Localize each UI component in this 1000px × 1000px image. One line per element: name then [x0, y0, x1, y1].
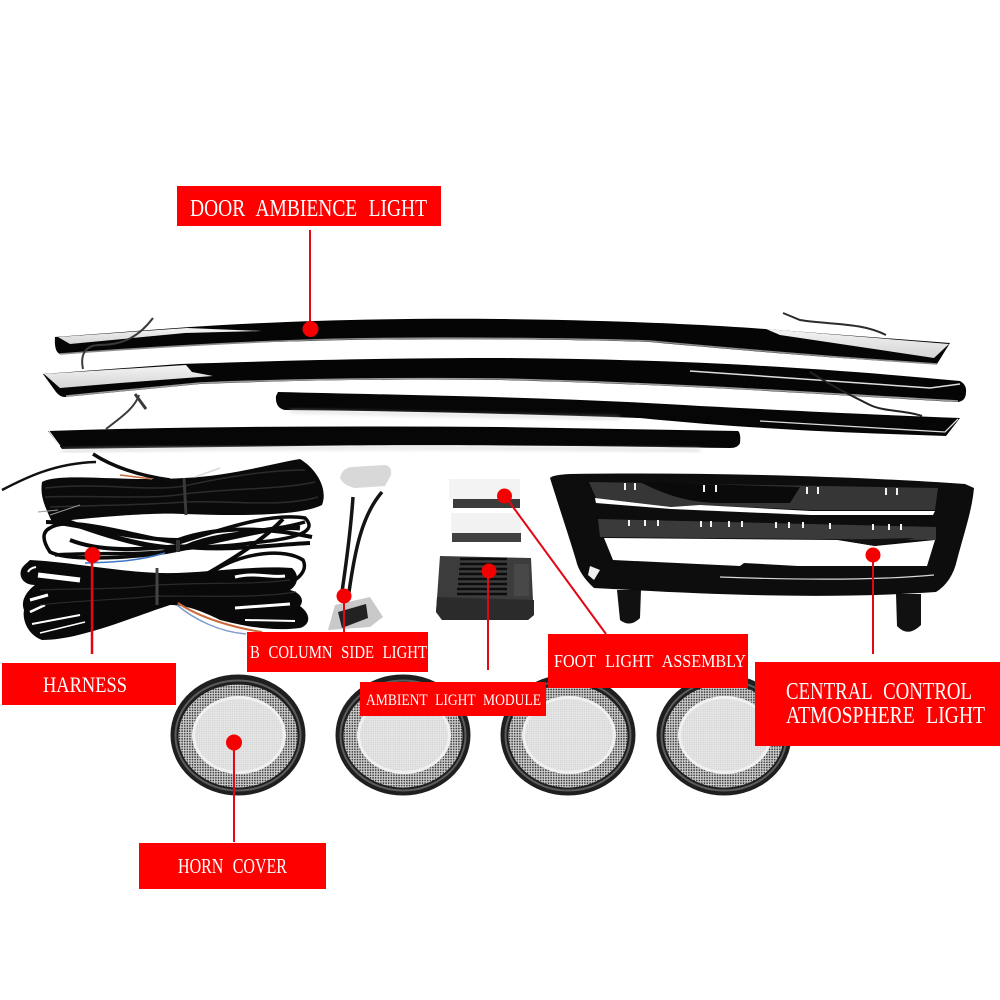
- panel: door ambience light strips: [43, 313, 966, 451]
- label: horn cover: [139, 843, 326, 889]
- horn cover 1: [170, 674, 306, 796]
- pointer: central control atmosphere light: [866, 548, 880, 654]
- harness upper bundle: [2, 454, 324, 522]
- panel: horn covers: [170, 674, 792, 796]
- label: door ambience light: DOOR AMBIENCE LIGHT: [190, 196, 427, 222]
- panel: wiring harness: [2, 454, 324, 640]
- upper slot: [589, 482, 938, 510]
- connector plate: [340, 465, 391, 488]
- label: ambient light module: [360, 682, 546, 716]
- harness lower bundle: [21, 560, 308, 640]
- bottom bracket: [328, 597, 383, 630]
- lead wires: [342, 492, 382, 592]
- label: B column side light: B COLUMN SIDE LIGHT: [250, 642, 427, 662]
- label: ambient light module: AMBIENT LIGHT MODULE: [366, 692, 541, 709]
- label: central control atmosphere light: [755, 662, 1000, 746]
- horn cover 4: [656, 674, 792, 796]
- pointer: door ambience light: [302, 230, 318, 337]
- pointer: horn cover: [226, 734, 242, 842]
- panel: B column side light: [328, 465, 391, 630]
- strip wires: [82, 313, 922, 429]
- lower window: [604, 538, 935, 566]
- ambient light module: [436, 556, 534, 620]
- pointer: B column side light: [336, 588, 352, 633]
- label: harness: HARNESS: [43, 672, 127, 697]
- harness middle loops: [44, 517, 312, 580]
- pointer: ambient light module: [482, 564, 496, 670]
- label: B column side light: [247, 632, 428, 672]
- lower slot band: [598, 519, 936, 540]
- label: door ambience light: [177, 186, 441, 226]
- horn cover 3: [500, 674, 636, 796]
- label: foot light assembly: [548, 634, 748, 688]
- strip 2: [43, 358, 966, 402]
- label: harness: [2, 663, 176, 705]
- horn cover 2: [336, 674, 470, 796]
- white clips: [624, 483, 902, 530]
- pointer: foot light assembly: [497, 488, 606, 634]
- foot light assembly: [449, 479, 521, 542]
- pointer: harness: [84, 547, 100, 654]
- label: foot light assembly: FOOT LIGHT ASSEMBLY: [554, 651, 746, 671]
- strip 4: [48, 426, 740, 451]
- strip 1: [55, 319, 950, 364]
- strip 3: [276, 392, 960, 436]
- central control trim panel: [550, 473, 974, 632]
- label: horn cover: HORN COVER: [178, 854, 287, 878]
- mounting tabs: [617, 590, 921, 632]
- gloss highlight: [720, 575, 934, 579]
- frame: [550, 473, 974, 596]
